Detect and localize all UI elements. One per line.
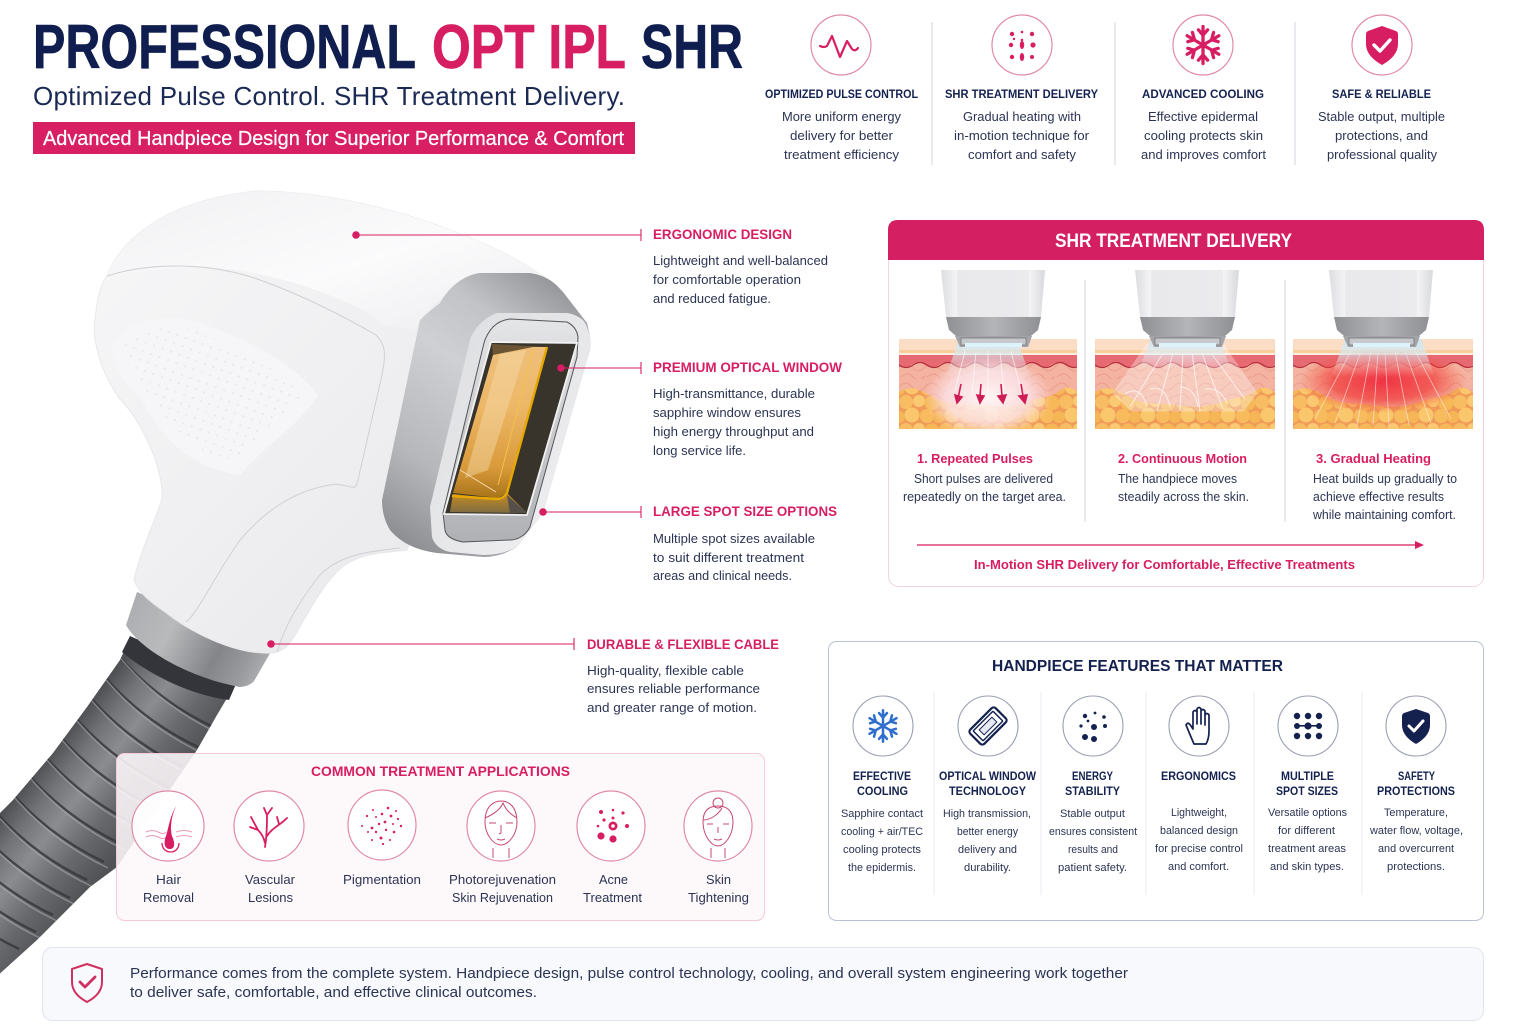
benefit: SHR treatment delivery: in-motion technique for (954, 128, 1090, 143)
subtitle: Optimized Pulse Control. SHR Treatment Delivery. (33, 81, 625, 111)
note text: to deliver safe, comfortable, and effective clinical outcomes. (130, 985, 537, 1001)
feature: effective cooling: cooling + air/TEC (841, 826, 923, 838)
feature: optical window technology (939, 696, 1036, 874)
feature: energy stability: ensures consistent (1049, 826, 1137, 838)
step 3 illustration (1291, 270, 1475, 429)
callout: durable and flexible cable: DURABLE & FLEXIBLE CABLE (587, 636, 779, 652)
callout: ergonomic design (352, 226, 828, 306)
feature: safety protections: SAFETY (1398, 771, 1435, 783)
feature: multiple spot sizes: SPOT SIZES (1276, 786, 1338, 798)
feature: energy stability (1049, 696, 1137, 874)
callout: premium optical window (557, 359, 843, 458)
application: skin tightening: Skin (706, 872, 731, 887)
application: photorejuvenation: Photorejuvenation (449, 872, 556, 887)
feature: ergonomics: for precise control (1155, 843, 1243, 855)
feature: effective cooling: EFFECTIVE (853, 771, 911, 783)
application: pigmentation: Pigmentation (343, 872, 421, 887)
feature: optical window technology: better energy (957, 826, 1018, 838)
application: pigmentation (343, 790, 421, 887)
callout: durable and flexible cable (267, 636, 779, 715)
feature: energy stability: ENERGY (1072, 771, 1113, 783)
title: PROFESSIONAL (33, 13, 416, 82)
light front rim (430, 313, 590, 555)
application: vascular lesions (234, 791, 304, 905)
application: vascular lesions: Lesions (248, 890, 293, 905)
feature: effective cooling: COOLING (857, 786, 908, 798)
feature: ergonomics: balanced design (1160, 825, 1238, 837)
feature: energy stability: results and (1068, 844, 1118, 856)
title (33, 13, 743, 82)
banner (33, 122, 635, 154)
benefit: optimized pulse control: delivery for better (790, 128, 894, 143)
benefit: advanced cooling: ADVANCED COOLING (1142, 87, 1264, 101)
feature: multiple spot sizes: for different (1278, 825, 1335, 837)
metal collar (126, 592, 272, 687)
title: SHR (641, 13, 743, 82)
feature: multiple spot sizes: treatment areas (1268, 843, 1346, 855)
top benefits row (765, 15, 1445, 165)
panel header: SHR TREATMENT DELIVERY (1055, 231, 1292, 252)
step 1 caption: Short pulses are delivered (914, 472, 1053, 486)
callout: premium optical window: High-transmittance, durable (653, 386, 815, 401)
benefit: safe and reliable: Stable output, multiple (1318, 109, 1445, 124)
applications heading: COMMON TREATMENT APPLICATIONS (311, 763, 570, 779)
panel header (888, 220, 1484, 260)
callout: ergonomic design: and reduced fatigue. (653, 291, 771, 306)
application: hair removal: Hair (156, 872, 182, 887)
step 1 caption: repeatedly on the target area. (903, 490, 1066, 504)
callout: ergonomic design: for comfortable operation (653, 272, 801, 287)
step 2 caption (1118, 451, 1249, 504)
feature: effective cooling: Sapphire contact (841, 808, 923, 820)
step 2 illustration (1093, 270, 1277, 429)
feature: optical window technology: delivery and (958, 844, 1017, 856)
feature: ergonomics: and comfort. (1168, 861, 1229, 873)
benefit: safe and reliable (1318, 15, 1445, 162)
feature: safety protections: protections. (1387, 861, 1445, 873)
step 1 illustration (897, 270, 1081, 437)
step 3 caption: achieve effective results (1313, 490, 1444, 504)
benefit: safe and reliable: professional quality (1327, 147, 1437, 162)
feature: energy stability: patient safety. (1058, 862, 1127, 874)
benefit: optimized pulse control: OPTIMIZED PULSE CONTROL (765, 87, 918, 101)
benefit: SHR treatment delivery: comfort and safety (968, 147, 1076, 162)
callout: large spot size options: to suit different treatment (653, 550, 804, 565)
feature: optical window technology: TECHNOLOGY (949, 786, 1026, 798)
pulse arrows (955, 384, 1027, 403)
note text: Performance comes from the complete system. Handpiece design, pulse control technology, cooling, and overall system engineering work together (130, 966, 1128, 982)
callout: large spot size options: LARGE SPOT SIZE OPTIONS (653, 503, 837, 519)
step 3 caption: 3. Gradual Heating (1316, 451, 1431, 466)
handpiece illustration (0, 191, 590, 990)
callout: ergonomic design: ERGONOMIC DESIGN (653, 226, 792, 242)
banner: Advanced Handpiece Design for Superior Performance & Comfort (43, 128, 624, 150)
application: acne treatment (577, 791, 645, 905)
callouts (267, 226, 843, 715)
benefit: SHR treatment delivery: Gradual heating with (963, 109, 1081, 124)
application: skin tightening (684, 791, 752, 905)
feature: ergonomics: Lightweight, (1171, 807, 1227, 819)
feature: safety protections: PROTECTIONS (1377, 786, 1455, 798)
application: vascular lesions: Vascular (245, 872, 296, 887)
callout: large spot size options (539, 503, 837, 583)
application: hair removal (132, 791, 204, 905)
feature: safety protections (1369, 696, 1463, 873)
benefit: optimized pulse control (765, 15, 918, 162)
icon: shield check (72, 964, 102, 1002)
application: photorejuvenation: Skin Rejuvenation (452, 890, 553, 905)
silver bezel (382, 273, 590, 557)
feature: optical window technology: High transmission, (943, 808, 1031, 820)
step 2 caption: steadily across the skin. (1118, 490, 1249, 504)
application: hair removal: Removal (143, 890, 194, 905)
feature: multiple spot sizes: MULTIPLE (1281, 771, 1334, 783)
step 3 caption: while maintaining comfort. (1312, 508, 1456, 522)
benefit: advanced cooling: and improves comfort (1141, 147, 1266, 162)
sapphire window (444, 342, 577, 515)
features heading: HANDPIECE FEATURES THAT MATTER (992, 658, 1283, 675)
feature: safety protections: and overcurrent (1378, 843, 1454, 855)
callout: ergonomic design: Lightweight and well-balanced (653, 253, 828, 268)
title: OPT IPL (432, 13, 626, 82)
application: acne treatment: Acne (599, 872, 628, 887)
body shell (94, 191, 548, 653)
callout: premium optical window: PREMIUM OPTICAL WINDOW (653, 359, 843, 375)
benefit: safe and reliable: protections, and (1335, 128, 1428, 143)
feature: energy stability: Stable output (1060, 808, 1125, 820)
feature: multiple spot sizes: and skin types. (1270, 861, 1344, 873)
feature: effective cooling: cooling protects (843, 844, 922, 856)
note text (130, 966, 1128, 1001)
feature: optical window technology: OPTICAL WINDOW (939, 771, 1036, 783)
panel: common treatment applications (116, 754, 764, 920)
feature: effective cooling (841, 696, 923, 874)
top shell highlight (107, 191, 548, 330)
cable (0, 653, 226, 974)
benefit: SHR treatment delivery: SHR TREATMENT DELIVERY (945, 87, 1098, 101)
callout: premium optical window: long service life. (653, 443, 746, 458)
seam lines (107, 266, 400, 652)
step 2 caption: The handpiece moves (1118, 472, 1237, 486)
step 2 caption: 2. Continuous Motion (1118, 451, 1247, 466)
callout: large spot size options: areas and clinical needs. (653, 568, 792, 583)
feature: multiple spot sizes: Versatile options (1268, 807, 1347, 819)
benefit: safe and reliable: SAFE & RELIABLE (1332, 87, 1431, 101)
feature: ergonomics (1155, 696, 1243, 873)
callout: durable and flexible cable: and greater range of motion. (587, 700, 757, 715)
delivery tagline: In-Motion SHR Delivery for Comfortable, Effective Treatments (974, 557, 1355, 572)
feature: multiple spot sizes (1268, 696, 1347, 873)
feature: safety protections: water flow, voltage, (1369, 825, 1463, 837)
benefit: advanced cooling: cooling protects skin (1144, 128, 1263, 143)
feature: effective cooling: the epidermis. (848, 862, 916, 874)
step 3 caption: Heat builds up gradually to (1313, 472, 1457, 486)
motion arrow (917, 541, 1424, 549)
callout: premium optical window: high energy throughput and (653, 424, 814, 439)
benefit: advanced cooling: Effective epidermal (1148, 109, 1258, 124)
application: acne treatment: Treatment (583, 890, 642, 905)
benefit: SHR treatment delivery (945, 15, 1098, 162)
callout: durable and flexible cable: ensures reliable performance (587, 681, 760, 696)
step 1 caption (903, 451, 1066, 504)
benefit: optimized pulse control: treatment efficiency (784, 147, 900, 162)
panel: handpiece features (828, 642, 1484, 920)
panel: performance note (42, 948, 1484, 1020)
feature: safety protections: Temperature, (1384, 807, 1448, 819)
benefit: advanced cooling (1141, 15, 1266, 162)
callout: large spot size options: Multiple spot sizes available (653, 531, 815, 546)
step 3 caption (1312, 451, 1457, 522)
panel: SHR treatment delivery (888, 220, 1484, 586)
feature: optical window technology: durability. (964, 862, 1011, 874)
application: photorejuvenation (449, 791, 556, 905)
feature: energy stability: STABILITY (1065, 786, 1120, 798)
application: skin tightening: Tightening (688, 890, 749, 905)
cable neck ring (122, 636, 236, 700)
optical window frame (443, 319, 578, 542)
textured grip (112, 318, 318, 475)
callout: premium optical window: sapphire window ensures (653, 405, 801, 420)
feature: ergonomics: ERGONOMICS (1161, 771, 1236, 783)
benefit: optimized pulse control: More uniform energy (782, 109, 901, 124)
step 1 caption: 1. Repeated Pulses (917, 451, 1033, 466)
callout: durable and flexible cable: High-quality, flexible cable (587, 663, 744, 678)
